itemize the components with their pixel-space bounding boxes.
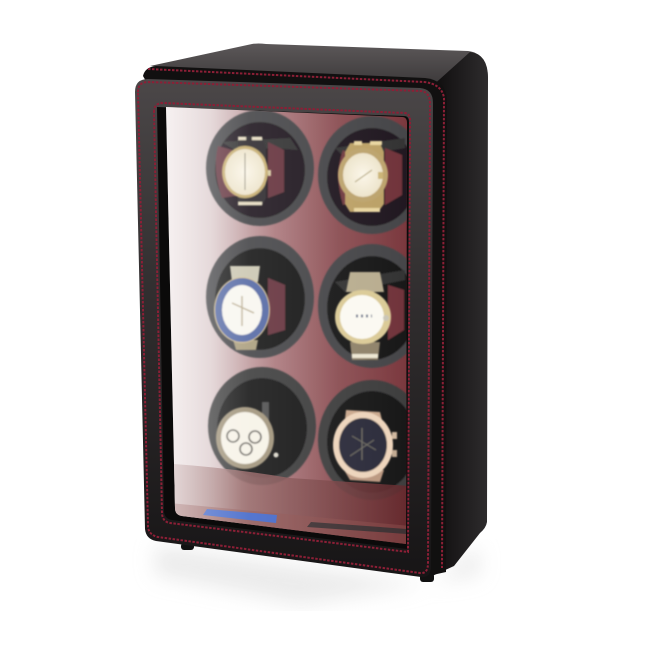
top panel [150,44,488,90]
front leather frame [135,79,433,577]
feet [181,543,434,582]
pod 4 [317,243,407,369]
watch 4 [335,272,391,360]
right side panel [430,52,488,577]
glass window interior [166,107,407,544]
winder pods [206,110,426,500]
foot left [181,543,194,550]
pod 3 [206,236,314,358]
front lip [175,504,406,544]
glass veil [166,107,407,544]
watch 2 [338,141,388,212]
watch 6 [333,410,397,482]
inner stitching [154,103,410,552]
blue display [203,509,277,523]
watch 3 [214,266,270,350]
watch 1 [222,136,271,206]
cabinet body [143,44,488,577]
pod 2 [317,116,407,235]
tray base [170,464,410,550]
pod 1 [206,110,314,226]
floor shadow [155,545,480,605]
foot right [420,573,434,582]
watches [214,136,397,482]
back panel [166,107,407,544]
window recess [157,107,409,549]
product photo: watch winder cabinet [135,44,488,606]
pod 6 [317,379,406,500]
outer stitching [138,82,430,573]
control panel [307,522,407,534]
pod 5 [208,367,316,485]
watch 5 [216,402,278,469]
rear frame with stitching [143,66,447,576]
